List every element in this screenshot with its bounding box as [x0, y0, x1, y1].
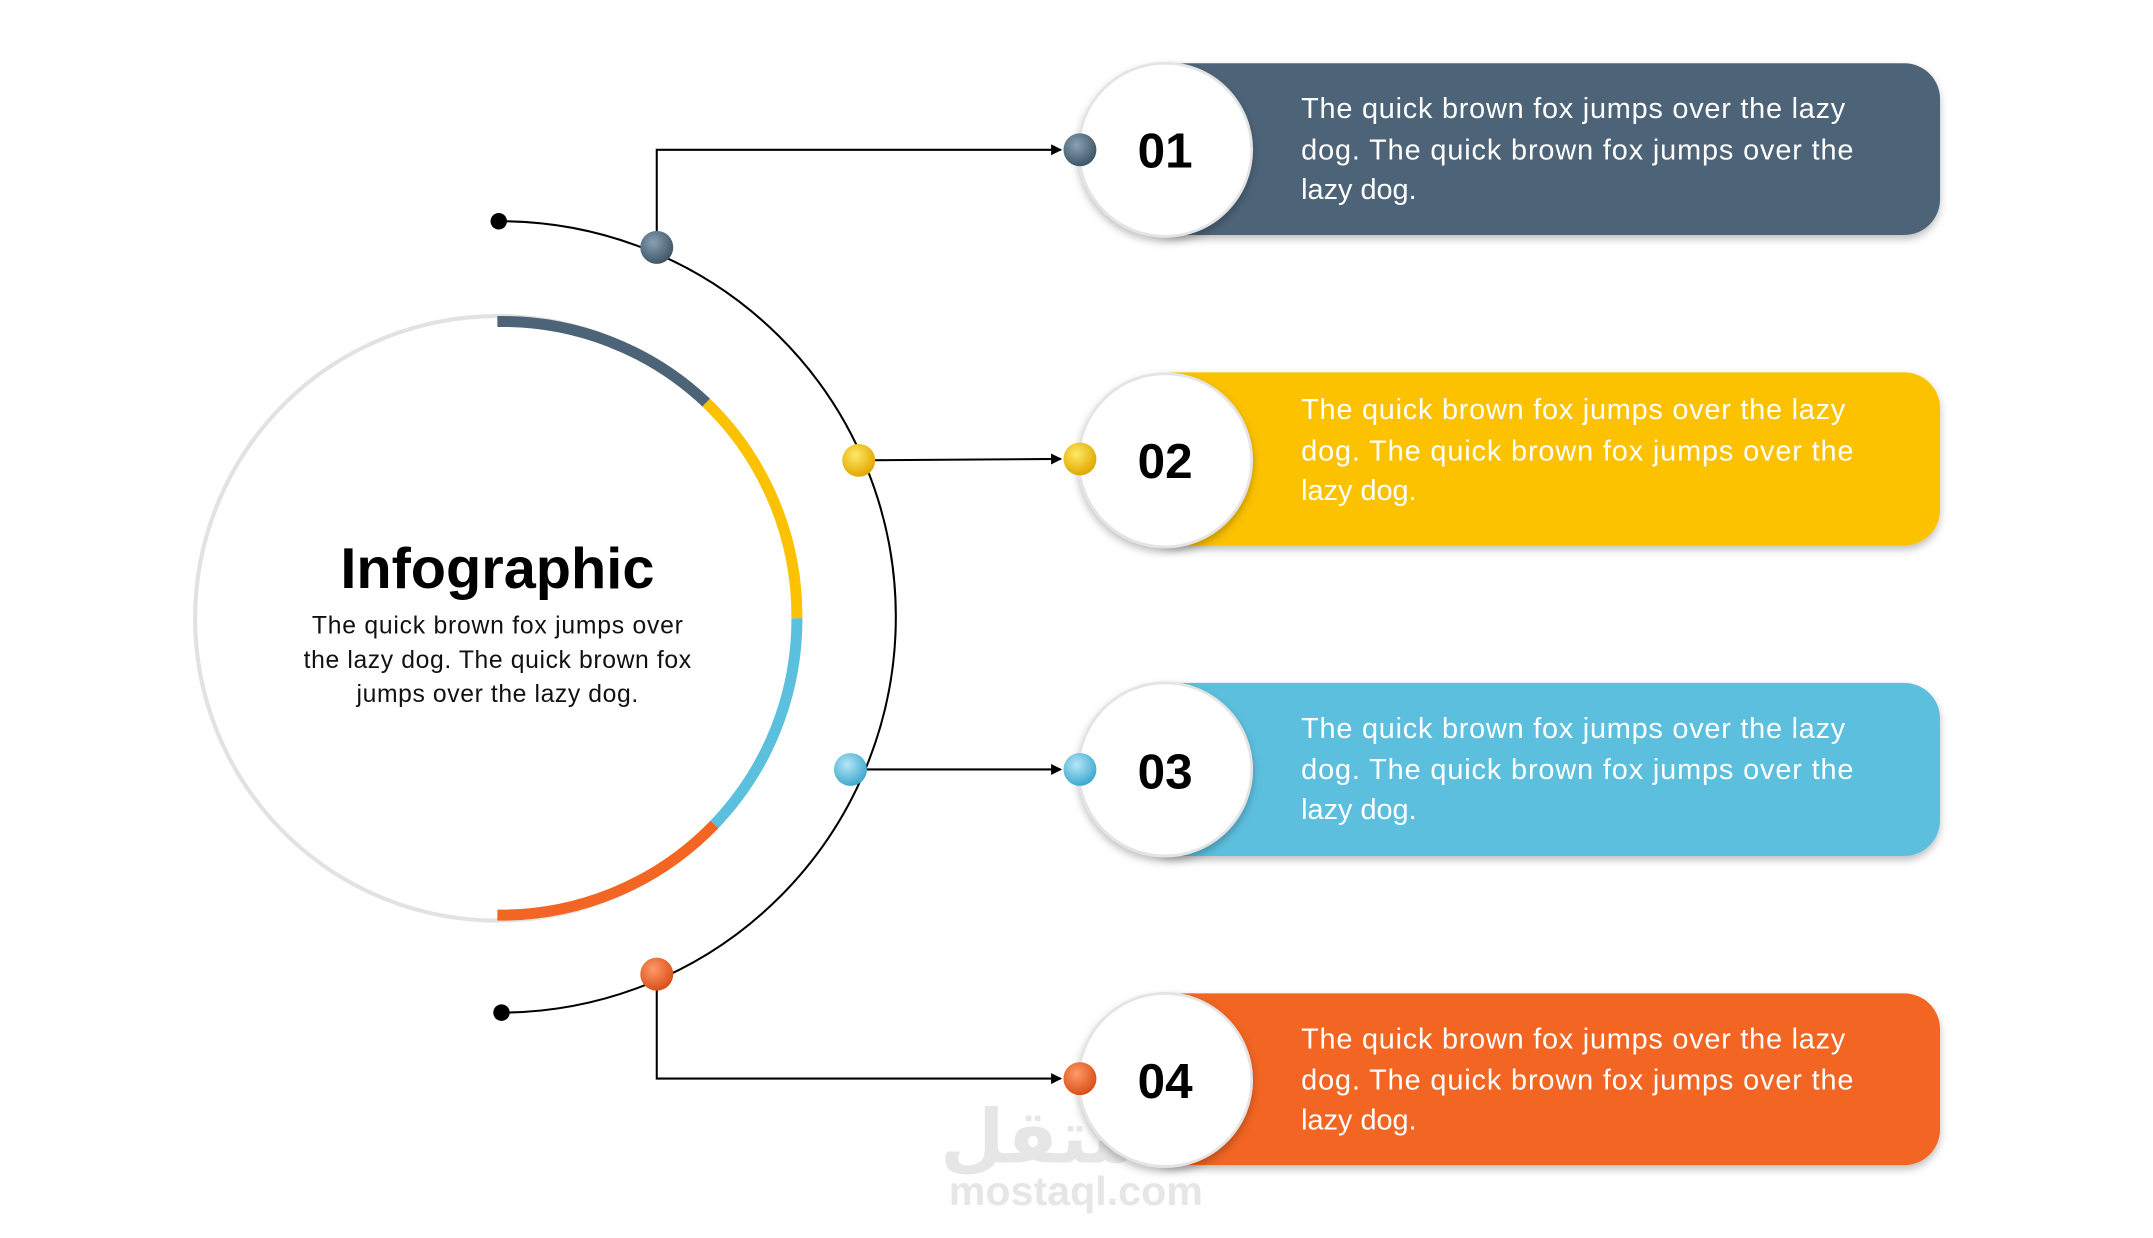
watermark	[940, 1095, 1211, 1214]
outer arc	[499, 221, 896, 1013]
panel 03: dog. The quick brown fox jumps over the	[1301, 754, 1853, 786]
panel 03: The quick brown fox jumps over the lazy	[1301, 713, 1846, 745]
panel 02: dog. The quick brown fox jumps over the	[1301, 435, 1853, 467]
panel 03: lazy dog.	[1301, 794, 1417, 826]
panel 01	[1063, 63, 1940, 236]
center text: jumps over the lazy dog.	[356, 681, 638, 708]
watermark: مستقل	[940, 1095, 1211, 1178]
center text: The quick brown fox jumps over	[312, 612, 683, 639]
panel 04: The quick brown fox jumps over the lazy	[1301, 1023, 1846, 1055]
panel 01: lazy dog.	[1301, 174, 1417, 206]
panel 02: The quick brown fox jumps over the lazy	[1301, 394, 1846, 426]
arc balls	[640, 231, 673, 264]
central circle	[195, 316, 800, 921]
arc segments	[497, 321, 797, 915]
panel 04: 04	[1138, 1054, 1193, 1109]
watermark: mostaql.com	[949, 1168, 1203, 1214]
panel 04: lazy dog.	[1301, 1104, 1417, 1136]
panel 02	[1063, 372, 1940, 547]
connectors	[657, 150, 1061, 1079]
panel 01: dog. The quick brown fox jumps over the	[1301, 134, 1853, 166]
panel 04: dog. The quick brown fox jumps over the	[1301, 1065, 1853, 1097]
panel 02: lazy dog.	[1301, 475, 1417, 507]
center text	[304, 612, 692, 708]
panel 02: 02	[1138, 434, 1193, 489]
panel 03: 03	[1138, 745, 1193, 800]
panel 04	[1063, 993, 1940, 1167]
panel 01: 01	[1138, 124, 1193, 179]
panel 01: The quick brown fox jumps over the lazy	[1301, 93, 1846, 125]
panel 03	[1063, 683, 1940, 856]
title: Infographic	[340, 537, 654, 601]
center text: the lazy dog. The quick brown fox	[304, 647, 692, 674]
